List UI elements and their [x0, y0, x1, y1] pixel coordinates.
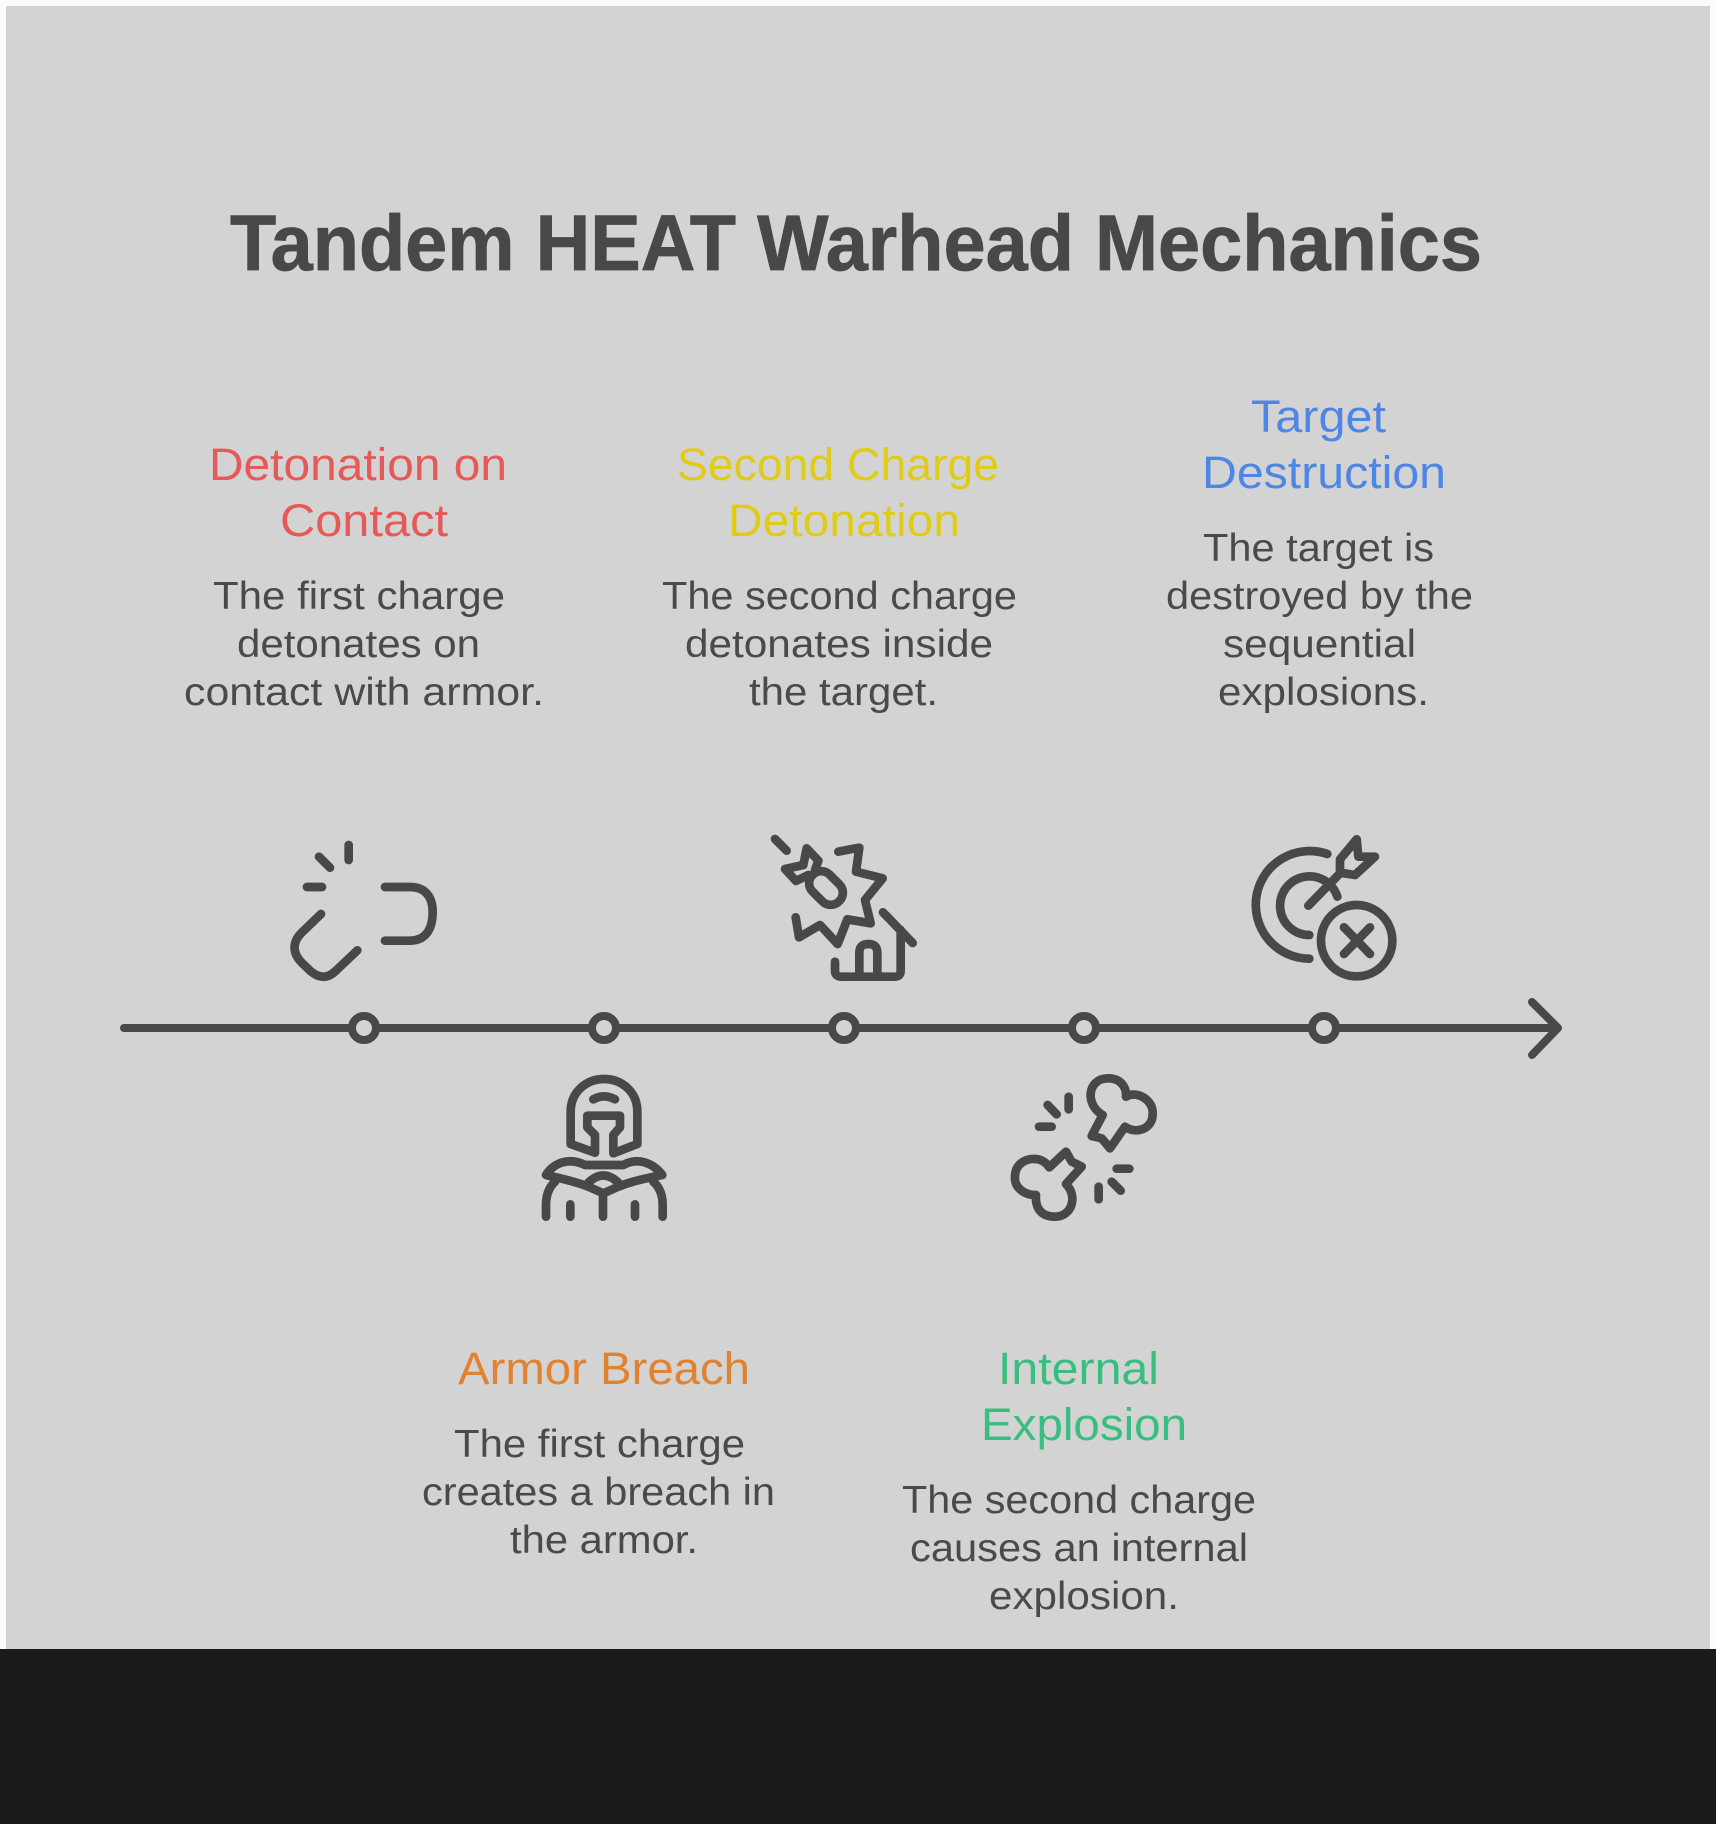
step 5 description: sequential	[1223, 623, 1416, 666]
step 5 description: destroyed by the	[1166, 575, 1473, 618]
step 2 heading: Armor Breach: Armor Breach	[458, 1343, 750, 1394]
step 1 description	[184, 575, 544, 714]
step 4 description	[902, 1479, 1256, 1618]
step 4 description: causes an internal	[910, 1527, 1248, 1570]
step 3 description: The second charge	[662, 575, 1017, 618]
step 1 heading: Detonation on Contact: Detonation on	[209, 439, 507, 490]
step 4 description: explosion.	[989, 1575, 1179, 1618]
step 1 heading: Detonation on Contact: Contact	[280, 495, 449, 546]
step 5 description: The target is	[1203, 527, 1434, 570]
step 4 heading: Internal Explosion: Explosion	[981, 1399, 1187, 1450]
step 4 description: The second charge	[902, 1479, 1256, 1522]
step 3 description: detonates inside	[685, 623, 993, 666]
step 3 heading: Second Charge Detonation: Detonation	[728, 495, 960, 546]
step 2 description	[422, 1423, 775, 1562]
step 5 description: explosions.	[1218, 671, 1429, 714]
title: Tandem HEAT Warhead Mechanics	[230, 198, 1482, 287]
step 3 description: the target.	[749, 671, 938, 714]
step 1 description: contact with armor.	[184, 671, 544, 714]
step 3 heading: Second Charge Detonation	[677, 439, 999, 546]
step 2 description: the armor.	[510, 1519, 698, 1562]
step 1 heading: Detonation on Contact	[209, 439, 507, 546]
step 1 description: detonates on	[237, 623, 480, 666]
icon: broken link	[295, 845, 433, 977]
icon: target with arrow and cross	[1256, 839, 1392, 976]
icon: internal explosion fragments	[1015, 1078, 1153, 1217]
icon: bomb exploding on house	[775, 839, 913, 977]
step 4 heading: Internal Explosion	[981, 1343, 1187, 1450]
step 5 heading: Target Destruction: Destruction	[1202, 447, 1446, 498]
step 2 description: creates a breach in	[422, 1471, 775, 1514]
dark footer band	[0, 1649, 1716, 1824]
step 2 description: The first charge	[454, 1423, 745, 1466]
step 3 description	[662, 575, 1017, 714]
step 5 heading: Target Destruction: Target	[1251, 391, 1387, 442]
step 5 description	[1166, 527, 1473, 714]
step 4 heading: Internal Explosion: Internal	[998, 1343, 1159, 1394]
step 1 description: The first charge	[213, 575, 505, 618]
icon: armored figure	[546, 1079, 663, 1217]
timeline arrow with nodes	[124, 1002, 1558, 1055]
step 5 heading: Target Destruction	[1202, 391, 1446, 498]
step 3 heading: Second Charge Detonation: Second Charge	[677, 439, 999, 490]
